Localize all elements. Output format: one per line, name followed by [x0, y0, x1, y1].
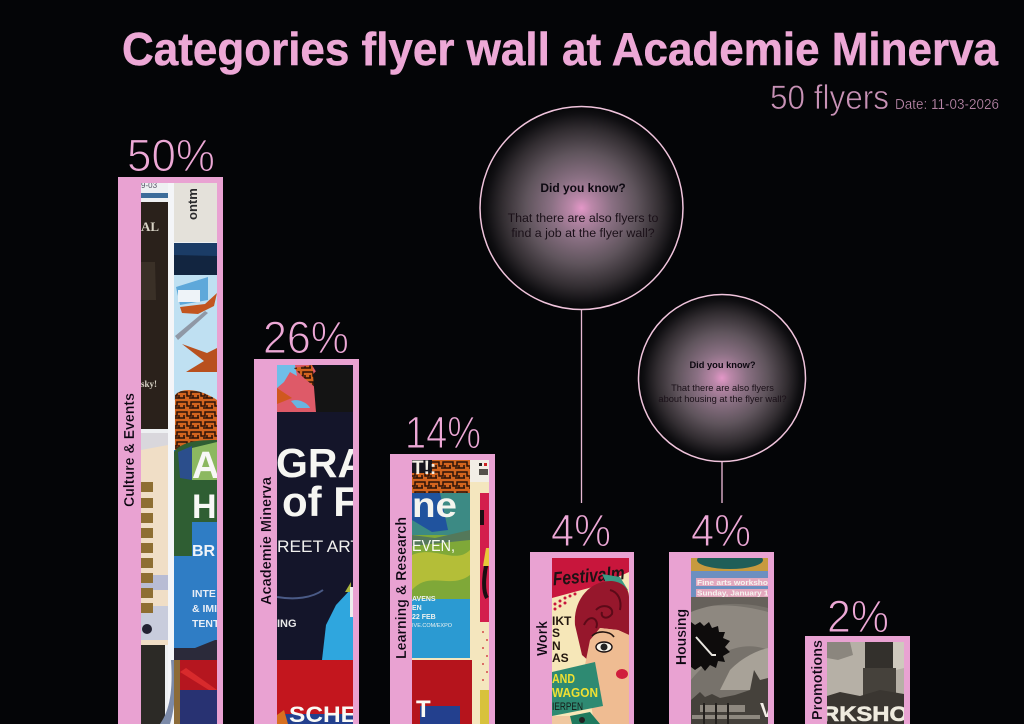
flyer collage: learning: AVENS [412, 596, 436, 603]
callout: did you know, jobs: find a job at the flyer wall? [511, 226, 655, 240]
flyer collage: culture: ontm [185, 188, 200, 220]
flyer: fine arts workshop [691, 558, 768, 724]
bar label: Academie Minerva: Academie Minerva [259, 476, 275, 605]
flyer collage: culture: AL [141, 219, 159, 234]
flyer collage: learning: EN [412, 605, 422, 612]
flyer collage: culture: H [192, 488, 217, 526]
flyer: pop-art festival: AND [552, 671, 575, 686]
bar: Academie Minerva 26% [254, 322, 359, 724]
callout: did you know, housing: about housing at the flyer wall? [658, 394, 787, 404]
flyer: fine arts workshop: V [760, 700, 774, 722]
flyer collage: academie: ING [277, 618, 297, 630]
callout: did you know, housing: Did you know? [689, 360, 756, 370]
flyer collage: academie: REET ART [277, 537, 361, 556]
flyer collage: learning: IVE.COM/EXPO [412, 623, 453, 629]
flyer collage: academie [277, 365, 353, 724]
flyer: fine arts workshop: Fine arts workshop [697, 578, 773, 587]
flyer collage: learning [412, 458, 489, 724]
flyer: pop-art festival: IKT [552, 614, 572, 628]
subtitle: flyer count and date [770, 79, 999, 117]
flyer collage: academie: of F [282, 478, 359, 525]
bar label: Culture & Events: Culture & Events [122, 393, 138, 507]
bar: Culture & Events 50% [118, 130, 223, 724]
value label: 26%: 26% [263, 312, 349, 363]
flyer collage: culture: 9-03 [141, 181, 158, 190]
flyer collage: learning: 22 FEB [412, 614, 436, 621]
callout: did you know, housing [638, 294, 806, 462]
callout: housing connector line [721, 462, 723, 503]
value label: 4%: 4% [551, 505, 611, 556]
bar: Learning & Research 14% [390, 407, 495, 724]
value label: 4%: 4% [691, 505, 751, 556]
flyer collage: academie: GRAF [276, 440, 392, 486]
flyer: fine arts workshop: Sunday, January 18 [697, 588, 773, 598]
callout: did you know, jobs [480, 106, 683, 310]
flyer: pop-art festival: WAGON [552, 685, 598, 700]
bar: Work 4% [530, 505, 634, 724]
flyer collage: culture: BR [192, 543, 216, 560]
bar label: Promotions: Promotions [810, 640, 826, 720]
title: Categories flyer wall at Academie Minerva [122, 23, 998, 75]
value label: 2%: 2% [827, 591, 889, 642]
flyer: pop-art festival: N [552, 639, 561, 653]
flyer collage: learning: T!: [412, 458, 436, 479]
flyer: pop-art festival: S [552, 626, 560, 640]
bar: Promotions 2% [805, 591, 910, 724]
flyer collage: culture: INTE [192, 588, 216, 600]
flyer: pop-art festival: Festivalm [552, 563, 626, 590]
bar label: Learning & Research: Learning & Research [394, 517, 410, 659]
flyer: pop-art festival: IERPEN [552, 701, 583, 713]
subtitle: flyer count and date: 50 flyers [770, 79, 889, 117]
flyer collage: learning: ne [412, 486, 457, 525]
flyer collage: learning: EVEN, [412, 538, 455, 555]
callout: did you know, jobs: That there are also flyers to [508, 211, 659, 225]
flyer collage: learning: T [416, 696, 431, 723]
flyer collage: culture [141, 181, 220, 724]
bar label: Housing: Housing [674, 609, 690, 665]
flyer collage: culture: & IMI [192, 603, 217, 615]
value label: 14%: 14% [405, 407, 481, 458]
callout: did you know, housing: That there are also flyers [671, 383, 774, 393]
flyer collage: culture: sky! [141, 379, 157, 389]
flyer collage: culture: A [192, 445, 219, 487]
flyer: pop-art festival [552, 558, 629, 724]
callout: jobs connector line [580, 310, 582, 503]
callout: did you know, jobs: Did you know? [540, 181, 626, 195]
value label: 50%: 50% [127, 130, 215, 181]
bar: Housing 4% [669, 505, 774, 724]
subtitle: flyer count and date: Date: 11-03-2026 [895, 96, 999, 113]
bar label: Work: Work [535, 620, 551, 656]
flyer collage: culture: TENT [192, 618, 220, 630]
flyer: pop-art festival: AS [552, 651, 569, 665]
